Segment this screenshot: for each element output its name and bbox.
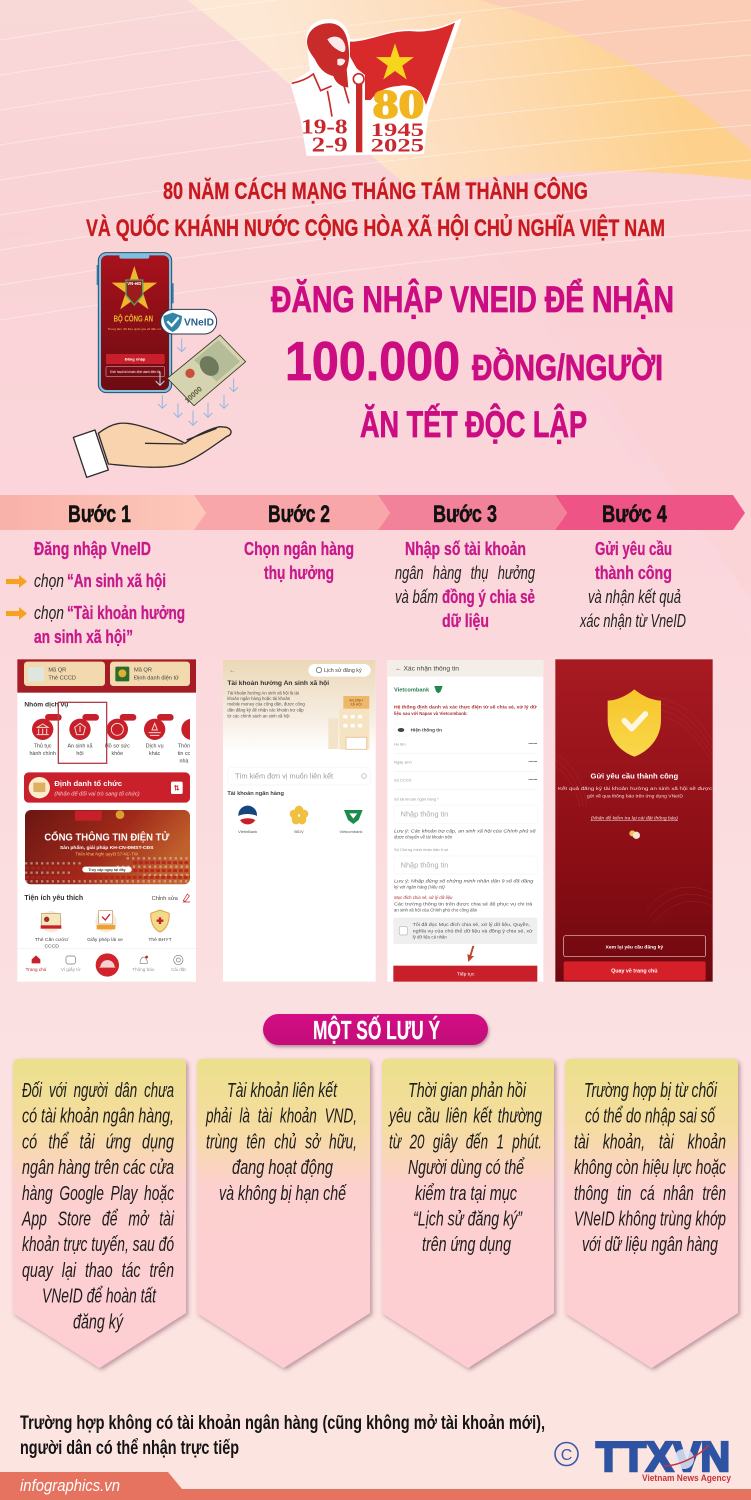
note 1: ngân hàng trên các cửa xyxy=(22,1157,174,1179)
screenshot: bank selection: BIDV xyxy=(294,829,304,834)
screenshot: confirm information: nghĩa vụ của chủ thể dữ liệu và đồng ý chia sẻ, xử xyxy=(413,929,533,934)
screenshot: confirm information: Số tài khoản ngân hàng * xyxy=(394,797,439,802)
TTXVN logo: C xyxy=(561,1447,572,1464)
step 1 text: “Tài khoản hưởng xyxy=(67,603,185,623)
step banner: Bước 3 xyxy=(433,501,497,528)
screenshot: VNeID home: khỏe xyxy=(112,750,123,757)
screenshot: VNeID home: Nhóm dịch vụ xyxy=(24,702,68,709)
screenshot: confirm information: Vietcombank xyxy=(394,687,430,693)
screenshot: confirm information: ← Xác nhận thông tin xyxy=(395,666,459,673)
step 1 text: “An sinh xã hội xyxy=(67,571,166,591)
note 3: yêu cầu liên kết thường xyxy=(388,1106,542,1128)
heading: notes pill: MỘT SỐ LƯU Ý xyxy=(313,1015,440,1045)
screenshot: VNeID home: CCCD xyxy=(44,944,59,950)
illustration: phone, banknote and hand: Kích hoạt tài khoản định danh điện tử xyxy=(110,370,161,374)
TTXVN logo: Vietnam News Agency xyxy=(642,1473,732,1484)
step 1 text: Đăng nhập VneID xyxy=(34,539,151,559)
bottom navigation: Trang chủ xyxy=(26,966,47,972)
screenshot: confirm information: ký với ngân hàng (Nếu có) xyxy=(394,885,445,890)
screenshot: VNeID home: Giấy phép lái xe xyxy=(87,937,123,943)
footer note xyxy=(20,1413,545,1459)
button: review request xyxy=(564,936,706,957)
icon: building: AN SINH xyxy=(349,699,363,703)
screenshot: VNeID home: nhà xyxy=(180,758,188,764)
screenshot: bank selection: VietinBank xyxy=(238,829,257,834)
step 2 text: Chọn ngân hàng xyxy=(244,539,354,559)
note 2: trùng tên chủ sở hữu, xyxy=(206,1131,357,1153)
screenshot: bank selection: từ các chính sách an sinh xã hội xyxy=(227,714,289,719)
heading: main headline xyxy=(271,278,674,445)
screenshot: VNeID home: Dịch vụ xyxy=(146,744,164,750)
step banner: Bước 4 xyxy=(602,501,667,528)
step 4 text: xác nhận từ VneID xyxy=(579,611,686,631)
note 4 xyxy=(565,1059,738,1368)
screenshot: bank selection: dân đăng ký để nhận các khoản trợ cấp xyxy=(227,708,304,713)
screenshot: confirm information: ••••••• xyxy=(528,759,538,763)
step 3 text: dữ liệu xyxy=(442,611,489,631)
icon: banknote xyxy=(167,335,246,406)
button: back to home: Quay về trang chủ xyxy=(611,969,658,975)
screenshot: VNeID home: hành chính xyxy=(29,751,56,757)
screenshot: VNeID home: Tiện ích yêu thích xyxy=(24,895,83,902)
screenshot: VNeID home: Mã QR xyxy=(48,668,66,674)
step 1 text: chọn xyxy=(34,603,64,623)
highlight box xyxy=(58,702,107,763)
step 3 text: Nhập số tài khoản xyxy=(405,539,526,559)
portal banner xyxy=(25,810,190,884)
button: review request: Xem lại yêu cầu đăng ký xyxy=(606,945,663,951)
note 3: “Lịch sử đăng ký” xyxy=(413,1208,523,1230)
footer strip with site name: infographics.vn xyxy=(20,1476,120,1495)
step banner: Bước 1 xyxy=(68,501,131,528)
screenshot: VNeID home: Chỉnh sửa xyxy=(152,895,179,902)
logo: 80 years emblem: 80 xyxy=(373,81,424,126)
note 1: Đối với người dân chưa xyxy=(22,1080,174,1102)
illustration: phone, banknote and hand: Đăng nhập xyxy=(125,357,146,362)
screenshot: confirm information: Hiện thông tin xyxy=(411,727,442,732)
organization card: (Nhấn để đổi vai trò sang tổ chức) xyxy=(54,790,140,797)
note 1: đăng ký xyxy=(73,1311,124,1333)
portal banner: Truy cập ngay tại đây xyxy=(88,868,127,872)
note 3: Thời gian phản hồi xyxy=(408,1080,526,1102)
icon: building: XÃ HỘI xyxy=(350,702,362,707)
screenshot: VNeID home: khác xyxy=(149,751,161,757)
screenshot: confirm information: Lưu ý: Các khoản trợ cấp, an sinh xã hội của Chính phủ sẽ xyxy=(394,828,536,833)
screenshot: bank selection: Tài khoản hưởng An sinh xã hội xyxy=(227,680,329,687)
icon: VNeID badge xyxy=(161,309,217,334)
continue button xyxy=(393,966,537,982)
screenshot: bank selection: Tìm kiếm đơn vị muốn liên kết xyxy=(235,772,333,781)
screenshot: VNeID home: An sinh xã xyxy=(68,744,92,750)
organization card: ⇅ xyxy=(174,783,181,792)
note 1: có thể tải ứng dụng xyxy=(22,1131,174,1153)
arrow: to continue button xyxy=(467,946,474,962)
screenshot: confirm information: Tôi đã đọc Mục đích chia sẻ, xử lý dữ liệu, Quyền, xyxy=(413,922,530,927)
screenshot: VNeID home: Mã QR xyxy=(134,668,152,674)
step 1 text xyxy=(6,539,185,647)
bottom navigation: Cài đặt xyxy=(171,967,186,972)
screenshot: request success xyxy=(555,659,713,982)
screenshot: confirm information: Nhập thông tin xyxy=(401,810,448,819)
note 2: phải là tài khoản VND, xyxy=(205,1106,357,1128)
continue button: Tiếp tục xyxy=(457,971,475,977)
portal banner: Sản phẩm, giải pháp KH-CN-ĐMST-CĐS xyxy=(60,844,154,851)
bank logos xyxy=(238,806,363,824)
step 1 text: an sinh xã hội” xyxy=(34,627,133,647)
screenshot: confirm information: Nhập thông tin xyxy=(401,860,448,869)
screenshot: request success: (Nhấn để kiểm tra lại cài đặt thông báo) xyxy=(591,814,678,821)
screenshot: request success: gửi về qua thông báo trên ứng dụng VNeID xyxy=(587,792,683,799)
screenshot: bank selection: Tài khoản ngân hàng xyxy=(227,791,284,797)
screenshot: VNeID home: Định danh điện tử xyxy=(134,674,179,681)
screenshot: confirm information: Số CCCD xyxy=(394,777,412,782)
screenshot: bank selection: Vietcombank xyxy=(340,829,362,834)
step 3 text xyxy=(395,539,535,631)
footer strip with site name xyxy=(0,1472,751,1500)
note 3 xyxy=(382,1059,554,1368)
note 1: hàng Google Play hoặc xyxy=(22,1183,174,1205)
screenshot: VNeID home: hội xyxy=(76,751,84,757)
screenshot: confirm information xyxy=(387,660,543,982)
icon: VNeID badge: VNeID xyxy=(184,317,214,328)
step 4 text: thành công xyxy=(595,563,672,583)
note 1: quay lại thao tác trên xyxy=(22,1260,174,1282)
note 1: App Store để mở tài xyxy=(21,1208,174,1230)
screenshot: VNeID home: Thôn xyxy=(178,744,190,750)
note 2 xyxy=(197,1059,370,1368)
illustration: phone, banknote and hand: VN-eID xyxy=(127,281,141,286)
logo: 80 years emblem: 19-8 xyxy=(301,116,348,138)
button: back to home xyxy=(564,961,706,981)
logo: 80 years emblem: 1945 xyxy=(371,120,424,141)
note 3: kiểm tra tại mục xyxy=(415,1183,517,1205)
organization card: Định danh tổ chức xyxy=(54,779,123,788)
screenshot: bank selection: khoản ngân hàng hoặc tài khoản xyxy=(227,696,291,701)
heading: main headline: 100.000 xyxy=(285,330,460,392)
note 1: VNeID để hoàn tất xyxy=(42,1286,157,1308)
screenshot: bank selection: Lịch sử đăng ký xyxy=(324,667,362,674)
screenshot: confirm information: ••••••• xyxy=(528,742,538,746)
icon: building xyxy=(328,696,369,749)
logo: 80 years emblem xyxy=(290,18,462,157)
bottom navigation: Thông báo xyxy=(132,967,155,972)
step 2 text xyxy=(244,539,354,583)
icon: success shield xyxy=(608,689,661,757)
screenshot: confirm information: liệu sau với Napas và Vietcombank: xyxy=(394,711,468,716)
step 2 text: thụ hưởng xyxy=(264,563,334,583)
screenshot: bank selection: mobile money của công dân, được công xyxy=(227,702,305,707)
note 3: từ 20 giây đến 1 phút. xyxy=(389,1131,542,1153)
note 2: và không bị hạn chế xyxy=(219,1183,347,1205)
organization card xyxy=(24,772,190,803)
step 3 text: ngân hàng thụ hưởng xyxy=(395,563,535,583)
screenshot: confirm information: Số Chứng minh nhân dân 9 số xyxy=(394,847,449,852)
step 4 text xyxy=(579,539,686,631)
screenshot: VNeID home: Thẻ Căn cước/ xyxy=(35,937,69,943)
note 2: đang hoạt động xyxy=(232,1157,333,1179)
screenshot: VNeID home: Hồ sơ sức xyxy=(105,744,130,750)
screenshot: confirm information: lý dữ liệu cá nhân xyxy=(413,935,447,940)
heading: main headline: ĂN TẾT ĐỘC LẬP xyxy=(360,403,587,445)
note 2: Tài khoản liên kết xyxy=(227,1080,338,1102)
logo: 80 years emblem: 2-9 xyxy=(312,135,348,157)
icon: falling arrows xyxy=(156,338,238,425)
screenshot: confirm information: ••••••• xyxy=(528,777,538,781)
step 1 text: chọn xyxy=(34,571,64,591)
note 3: Người dùng có thể xyxy=(408,1157,525,1179)
note 1 xyxy=(13,1059,186,1368)
screenshot: VNeID home: Thủ tục xyxy=(34,743,52,750)
step 4 text: và nhận kết quả xyxy=(588,587,681,607)
screenshot: confirm information: Mục đích chia sẻ, xử lý dữ liệu xyxy=(394,895,453,900)
TTXVN logo: TTXVN xyxy=(596,1433,730,1480)
screenshot: VNeID home: Thẻ CCCD xyxy=(48,675,76,681)
illustration: phone, banknote and hand: Trung tâm dữ liệu quốc gia về dân cư xyxy=(108,327,161,331)
step banner xyxy=(0,495,745,530)
icon: banknote: 10000 xyxy=(183,384,204,405)
screenshot: confirm information: Ngày sinh xyxy=(394,760,412,765)
bottom navigation: Ví giấy tờ xyxy=(61,967,81,972)
step 3 text: đồng ý chia sẻ xyxy=(442,587,535,607)
screenshot: VNeID home: Thẻ BHYT xyxy=(148,937,172,943)
note 3: trên ứng dụng xyxy=(422,1234,511,1256)
bottom navigation xyxy=(17,949,196,977)
illustration: phone, banknote and hand xyxy=(73,253,246,477)
illustration: phone, banknote and hand: BỘ CÔNG AN xyxy=(114,315,153,324)
icon: open hand xyxy=(73,423,231,477)
portal banner: CỔNG THÔNG TIN ĐIỆN TỬ xyxy=(44,832,170,844)
screenshot: bank selection: ← xyxy=(229,668,235,674)
step 3 text: và bấm xyxy=(395,587,438,607)
screenshot: bank selection: Tài khoản hưởng An sinh xã hội là tài xyxy=(227,690,299,695)
screenshot: request success: Kết quả đăng ký tài khoản hưởng an sinh xã hội sẽ được xyxy=(558,785,713,792)
portal banner: Triển khai Nghị quyết 57-NC-TW xyxy=(75,852,139,857)
screenshot: confirm information: được chuyển về tài khoản trên xyxy=(394,834,453,839)
step banner: Bước 2 xyxy=(268,501,330,528)
screenshot: request success: Gửi yêu cầu thành công xyxy=(591,771,678,780)
screenshot: confirm information: Các trường thông tin trên được chia sẻ để phục vụ chi trả xyxy=(394,902,533,907)
favorites icons xyxy=(40,910,169,932)
screenshot: confirm information: Lưu ý: Nhập đúng số chứng minh nhân dân 9 số đã đăng xyxy=(394,879,534,884)
screenshot: VNeID home: tin cc xyxy=(178,751,191,757)
footer note: người dân có thể nhận trực tiếp xyxy=(20,1438,239,1459)
footer note: Trường hợp không có tài khoản ngân hàng (cũng không mở tài khoản mới), xyxy=(20,1413,545,1434)
screenshot: VNeID home xyxy=(17,659,203,982)
screenshot: bank selection xyxy=(223,660,376,982)
screenshot: confirm information: Hệ thống định danh và xác thực điện tử sẽ chia sẻ, xử lý dữ xyxy=(394,705,538,710)
heading: anniversary title: 80 NĂM CÁCH MẠNG THÁNG TÁM THÀNH CÔNG xyxy=(163,177,588,205)
heading: main headline: ĐỒNG/NGƯỜI xyxy=(472,346,663,388)
logo: 80 years emblem: 2025 xyxy=(371,136,424,157)
screenshot: confirm information: an sinh xã hội của Chính phủ cho công dân xyxy=(394,908,478,913)
note 1: có tài khoản ngân hàng, xyxy=(22,1106,174,1128)
screenshot: confirm information: Họ tên xyxy=(394,742,406,747)
step 4 text: Gửi yêu cầu xyxy=(595,539,672,559)
note 1: khoản trực tuyến, sau đó xyxy=(22,1234,174,1256)
heading: anniversary title xyxy=(86,177,665,242)
